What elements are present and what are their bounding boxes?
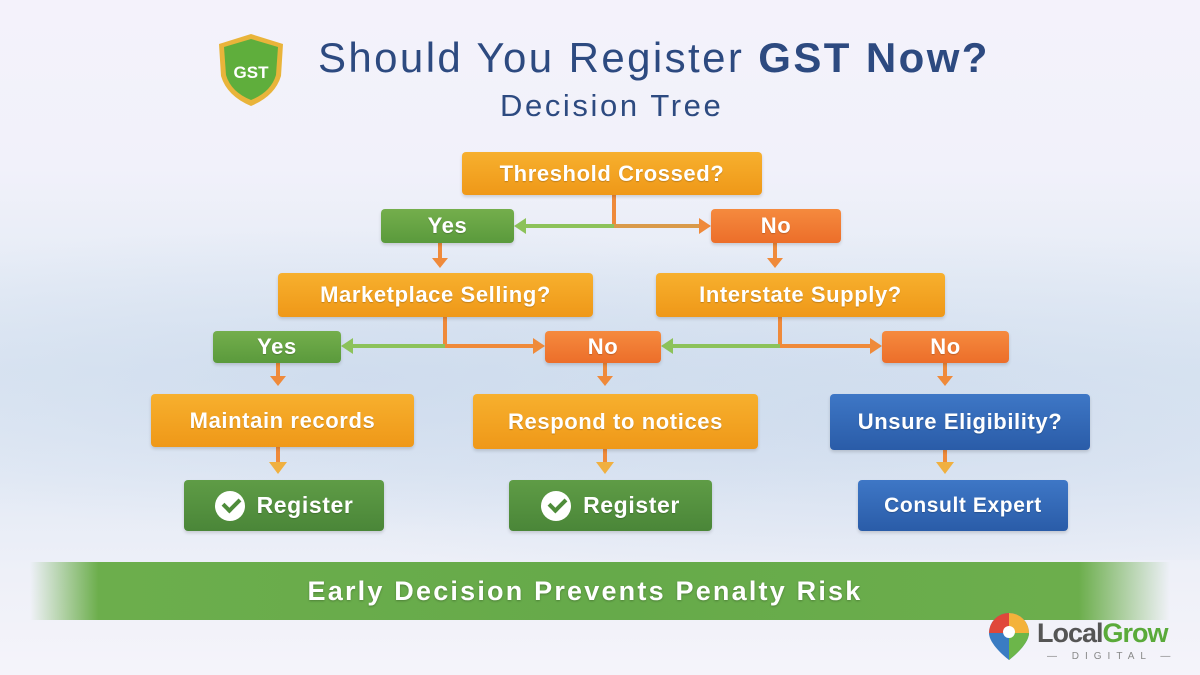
title: Should You Register GST Now? xyxy=(318,34,990,81)
result: Register 2: Register xyxy=(583,492,680,518)
node: Yes 2 xyxy=(213,331,341,363)
node: No 3 xyxy=(882,331,1009,363)
logo: LocalGrow Digital: — DIGITAL — xyxy=(1047,651,1176,662)
icon: GST shield xyxy=(219,34,283,106)
node: No: No xyxy=(761,213,791,238)
node: Yes xyxy=(381,209,514,243)
node: Unsure Eligibility?: Unsure Eligibility? xyxy=(858,409,1062,434)
node: Threshold Crossed? xyxy=(462,152,762,195)
node: Respond to notices: Respond to notices xyxy=(508,408,723,434)
node: Threshold Crossed?: Threshold Crossed? xyxy=(500,160,724,186)
node: Maintain records xyxy=(151,394,414,447)
node: Unsure Eligibility? xyxy=(830,394,1090,450)
node: Yes: Yes xyxy=(428,213,467,238)
node: Marketplace Selling? xyxy=(278,273,593,317)
logo: LocalGrow Digital: LocalGrow xyxy=(1037,618,1168,648)
node: No 2: No xyxy=(588,334,618,359)
node: Yes 2: Yes xyxy=(257,334,297,359)
node: Maintain records: Maintain records xyxy=(190,408,375,432)
node: No 3: No xyxy=(930,334,961,359)
node: Respond to notices xyxy=(473,394,758,449)
logo: LocalGrow Digital xyxy=(989,613,1176,662)
banner xyxy=(30,562,1170,620)
subtitle: Decision Tree xyxy=(500,88,723,123)
icon: GST shield: GST xyxy=(234,63,269,82)
result: Register 2 xyxy=(509,480,712,531)
node: No 2 xyxy=(545,331,661,363)
result: Consult Expert: Consult Expert xyxy=(884,494,1042,516)
node: Marketplace Selling?: Marketplace Selling? xyxy=(320,282,551,307)
background clouds xyxy=(0,200,1200,560)
result: Register 1: Register xyxy=(257,492,353,518)
result: Consult Expert xyxy=(858,480,1068,531)
node: Interstate Supply? xyxy=(656,273,945,317)
node: No xyxy=(711,209,841,243)
result: Register 1 xyxy=(184,480,384,531)
node: Interstate Supply?: Interstate Supply? xyxy=(699,282,902,307)
banner text: Early Decision Prevents Penalty Risk xyxy=(308,576,862,606)
